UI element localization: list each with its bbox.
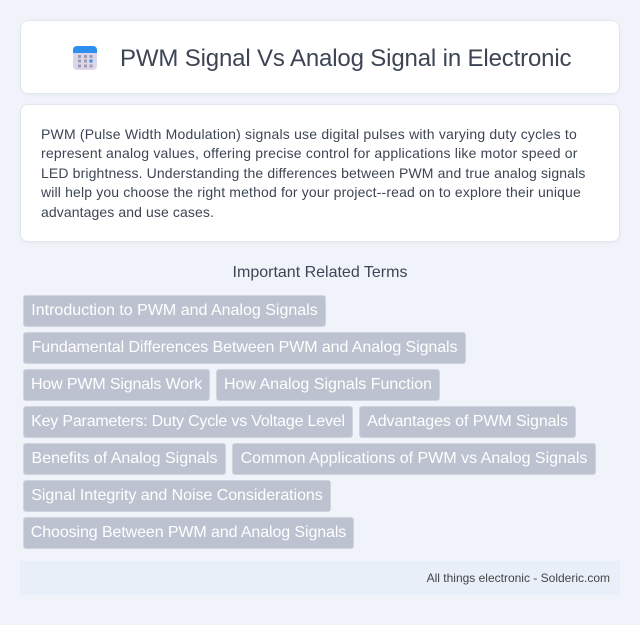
tag <box>23 517 354 549</box>
intro paragraph: will help you choose the right method for your project--read on to explore their unique <box>41 184 581 200</box>
tag: Choosing Between PWM and Analog Signals <box>31 524 346 541</box>
tag: Advantages of PWM Signals <box>367 413 568 430</box>
tag <box>23 406 353 438</box>
intro paragraph <box>41 126 585 220</box>
tag: How PWM Signals Work <box>31 376 202 393</box>
tag <box>232 443 596 475</box>
tag: How Analog Signals Function <box>224 376 432 393</box>
tag <box>359 406 576 438</box>
tag: Introduction to PWM and Analog Signals <box>31 302 318 319</box>
intro paragraph: LED brightness. Understanding the differences between PWM and true analog signals <box>41 165 585 181</box>
tag <box>23 369 210 401</box>
header card <box>20 20 620 94</box>
tag: Signal Integrity and Noise Considerations <box>31 487 323 504</box>
tag: Benefits of Analog Signals <box>32 450 217 467</box>
footer text: All things electronic - Solderic.com <box>427 571 610 585</box>
tag <box>23 295 326 327</box>
tag <box>23 480 331 512</box>
title: PWM Signal Vs Analog Signal in Electronic <box>120 45 571 72</box>
intro paragraph: represent analog values, offering precise control for applications like motor speed or <box>41 145 578 161</box>
tag: Common Applications of PWM vs Analog Signals <box>241 450 587 467</box>
tag: Key Parameters: Duty Cycle vs Voltage Level <box>31 413 345 430</box>
intro text panel <box>20 104 620 242</box>
intro paragraph: advantages and use cases. <box>41 204 214 220</box>
tag <box>23 332 466 364</box>
icon: calendar grid <box>73 46 97 70</box>
tag: Fundamental Differences Between PWM and Analog Signals <box>32 339 457 356</box>
footer bar <box>20 561 620 595</box>
tag <box>23 443 226 475</box>
section heading: Important Related Terms <box>233 264 407 281</box>
intro paragraph: PWM (Pulse Width Modulation) signals use digital pulses with varying duty cycles to <box>41 126 577 142</box>
related terms tags <box>23 295 596 549</box>
tag <box>216 369 440 401</box>
